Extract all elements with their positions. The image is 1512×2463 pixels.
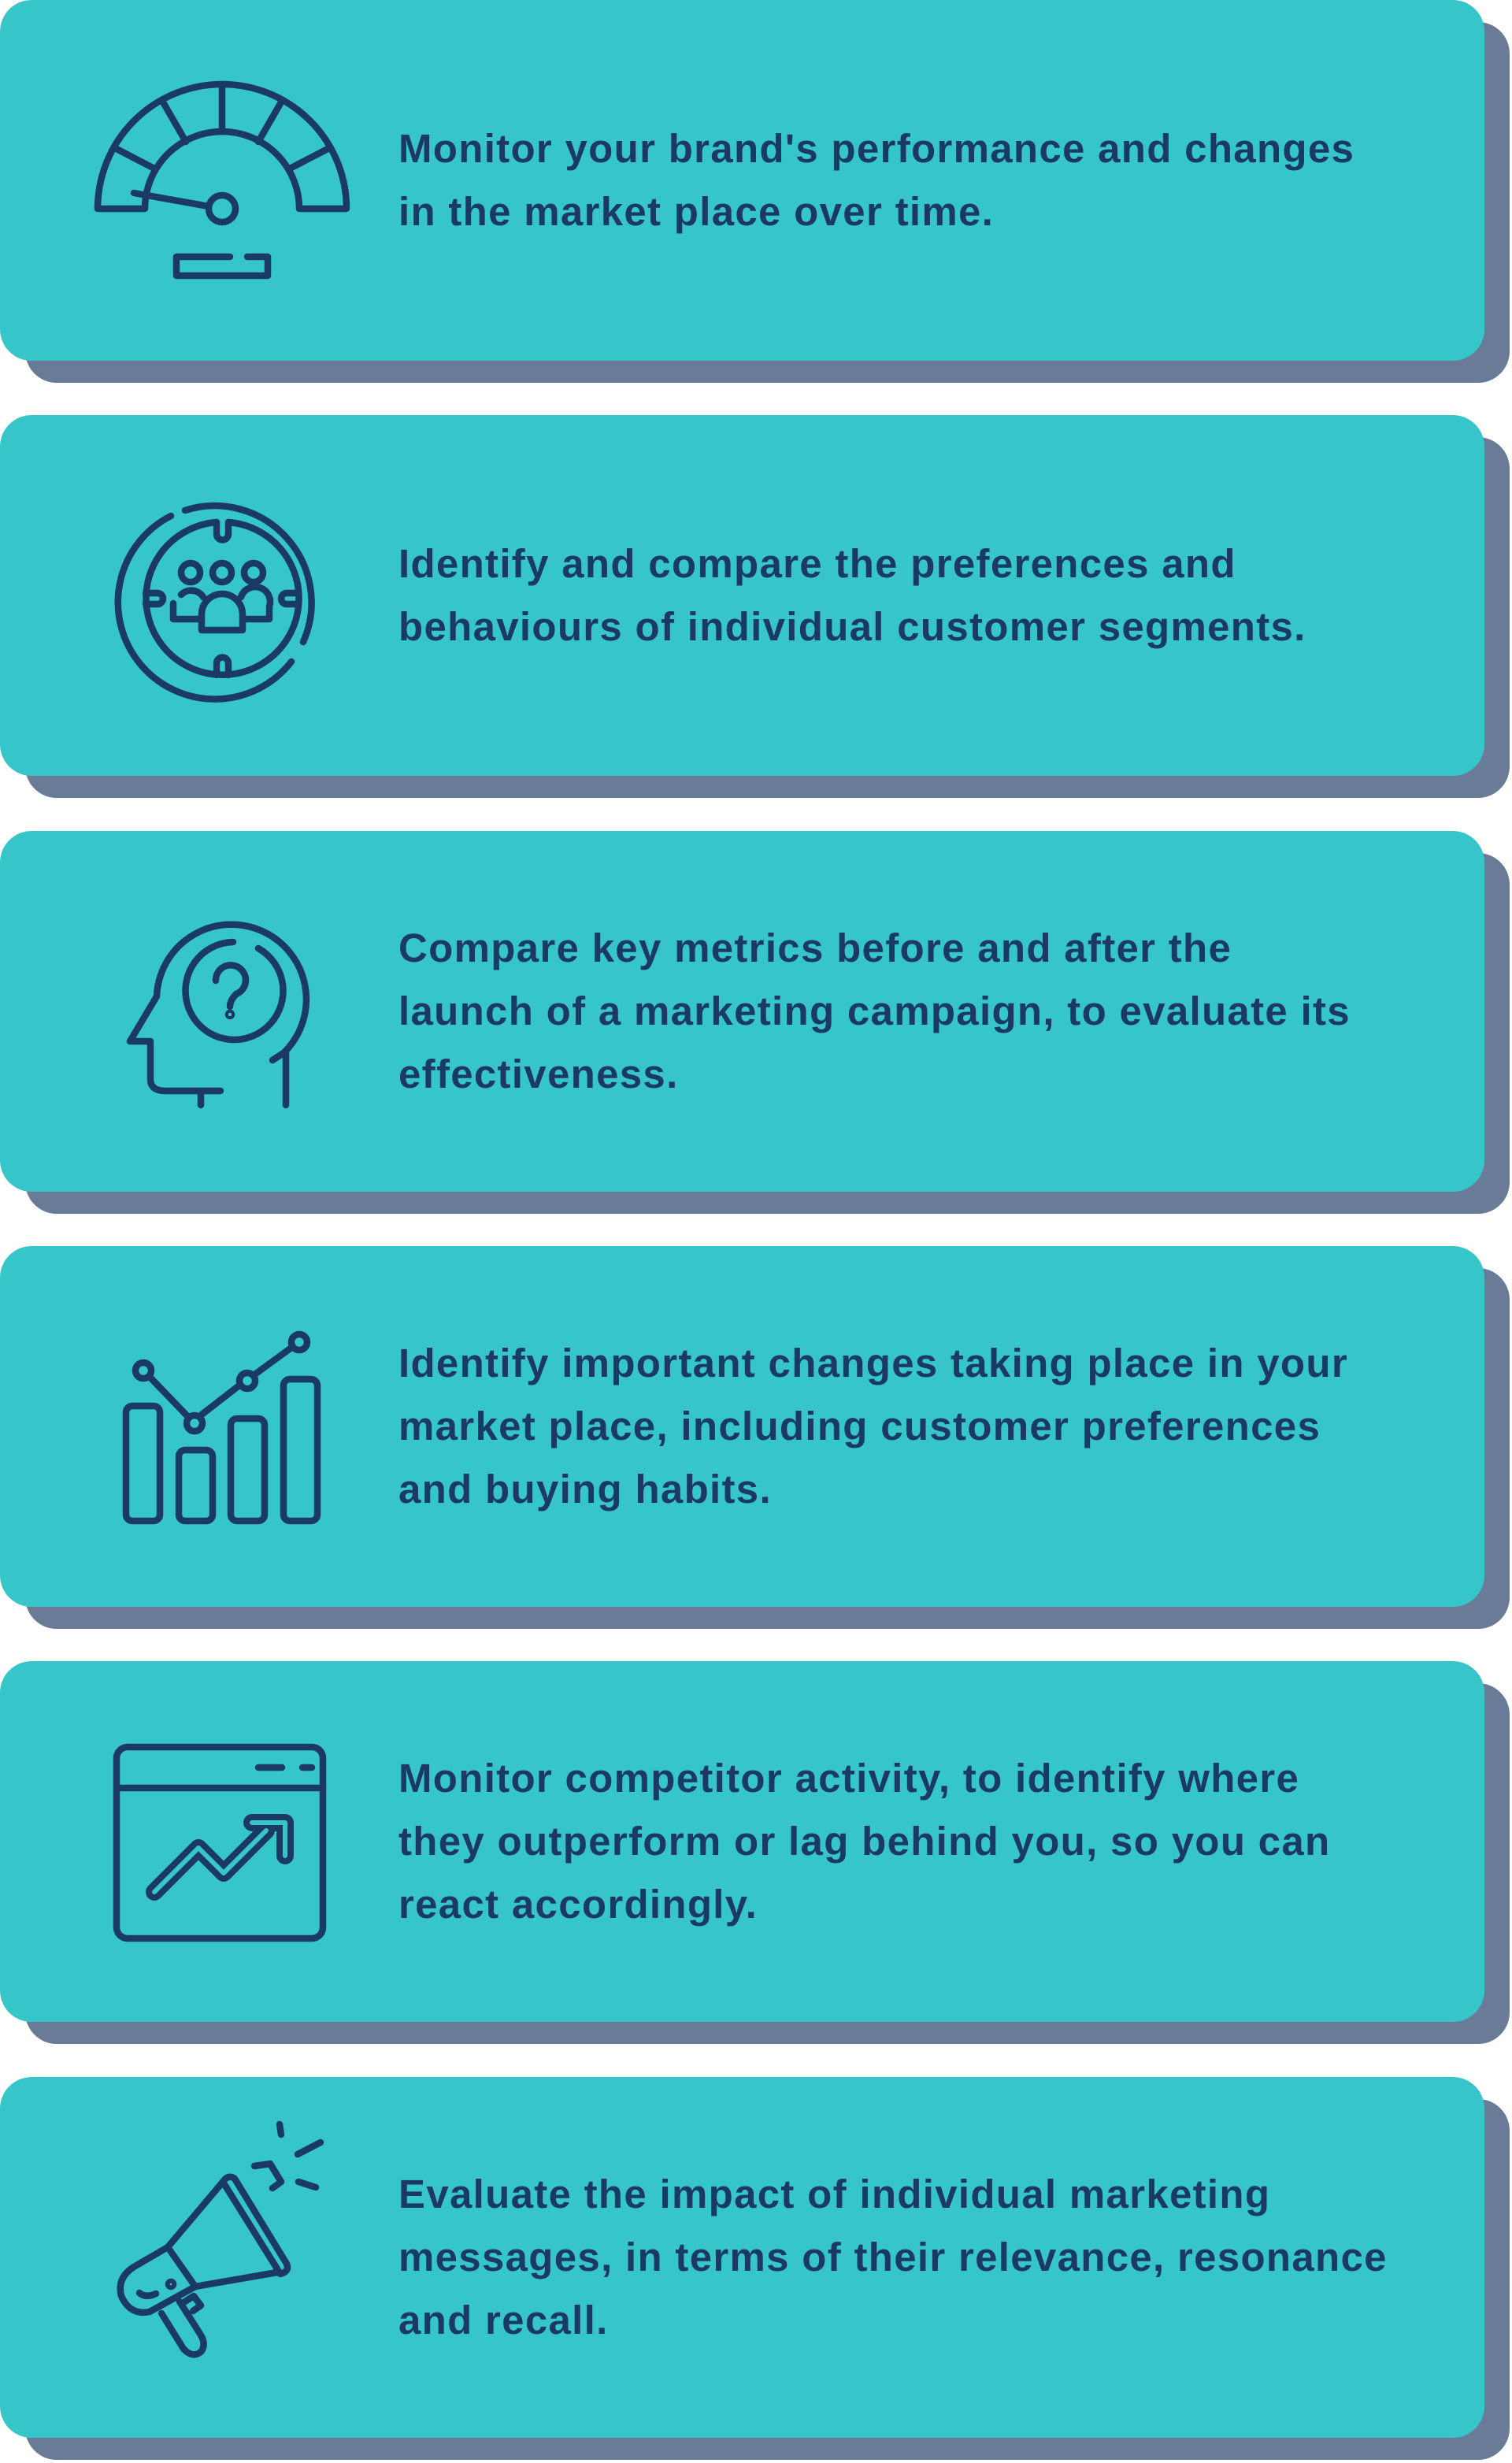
text 4	[398, 1341, 1348, 1512]
text 6: and recall.	[398, 2298, 609, 2342]
icon: megaphone	[117, 2120, 324, 2358]
text 2: behaviours of individual customer segments.	[398, 604, 1306, 649]
text 4: Identify important changes taking place in your	[398, 1341, 1348, 1385]
text 3: Compare key metrics before and after the	[398, 925, 1232, 970]
text 3: launch of a marketing campaign, to evaluate its	[398, 989, 1351, 1033]
text 4: market place, including customer preferences	[398, 1404, 1321, 1448]
text 1: Monitor your brand's performance and changes	[398, 126, 1354, 171]
text 1: in the market place over time.	[398, 189, 994, 234]
text 3	[398, 925, 1351, 1096]
card 6: marketing messages	[0, 2077, 1510, 2460]
text 5: Monitor competitor activity, to identify where	[398, 1756, 1299, 1801]
card 3: campaign metrics	[0, 831, 1510, 1214]
text 2	[398, 541, 1306, 649]
text 3: effectiveness.	[398, 1052, 679, 1096]
text 1	[398, 126, 1354, 234]
icon: gauge	[94, 80, 350, 279]
icon: head with question	[126, 922, 310, 1109]
text 5: they outperform or lag behind you, so you can	[398, 1819, 1330, 1864]
text 5	[398, 1756, 1330, 1927]
text 6: messages, in terms of their relevance, resonance	[398, 2235, 1388, 2279]
card 5: competitor activity	[0, 1661, 1510, 2044]
text 4: and buying habits.	[398, 1467, 772, 1512]
card 4: market changes	[0, 1246, 1510, 1629]
icon: browser trend	[113, 1744, 326, 1942]
text 5: react accordingly.	[398, 1882, 758, 1927]
card 1: brand performance	[0, 0, 1510, 383]
icon: bar chart	[123, 1331, 321, 1525]
text 6	[398, 2172, 1388, 2342]
icon: target people	[115, 503, 315, 703]
card 2: customer segments	[0, 415, 1510, 798]
text 2: Identify and compare the preferences and	[398, 541, 1236, 586]
text 6: Evaluate the impact of individual marketing	[398, 2172, 1270, 2216]
